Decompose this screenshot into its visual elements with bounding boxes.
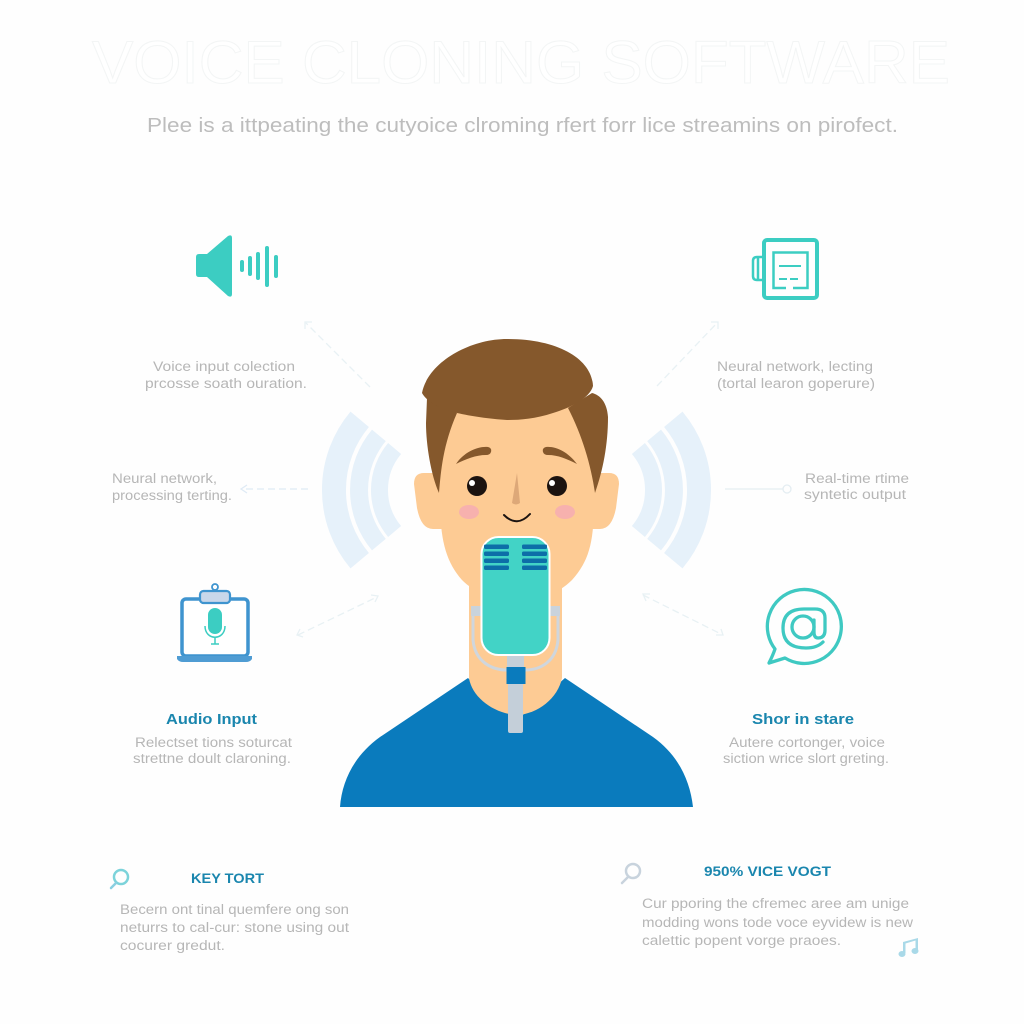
nose [512,473,520,504]
text: neural network testing: (tortal learon goperure) [717,376,875,391]
left ear [414,473,442,529]
heading: audio input: Audio Input [166,711,257,728]
eyes [467,476,567,496]
right ear [591,473,619,529]
icon: magnifier left [111,870,128,888]
text: key tort description: cocurer gredut. [120,938,225,953]
text: real-time output [804,471,909,502]
text: audio input description: strettne doult claroning. [133,751,291,766]
text: shor in stare description: Autere cortonger, voice [729,735,885,750]
icon: music note [898,938,918,957]
heading: 950% vice vogt: 950% VICE VOGT [704,863,831,879]
icon: at sign chat bubble [767,589,841,663]
eyebrows [456,447,577,464]
text: vice vogt description: Cur pporing the cfremec aree am unige [642,896,909,911]
text: audio input description [133,735,292,766]
text: voice input collection: prcosse soath ouration. [145,376,307,391]
text: key tort description [120,902,349,953]
cheeks [459,505,575,519]
icon: magnifier right [622,864,640,883]
arrow: double arrow left [297,595,378,637]
text: neural network processing: processing terting. [112,488,232,503]
face [440,400,594,600]
arrow: line with node to real-time text [725,485,791,493]
icon: laptop with microphone [177,584,252,662]
arrow: to neural network text [241,485,308,493]
text: shor in stare description: siction wrice slort greting. [723,751,889,766]
microphone yoke [473,607,558,670]
right sound waves [638,419,699,561]
text: neural network testing: Neural network, lecting [717,359,873,374]
microphone body [482,537,550,655]
text: neural network processing [112,471,232,503]
text: voice input collection: Voice input colection [153,359,295,374]
left sound waves [334,419,395,561]
icon: speaker with sound bars [196,235,278,297]
icon: document [753,240,817,298]
arrow: double arrow right [643,594,723,635]
text: real-time output: syntetic output [804,487,906,502]
shirt [340,678,693,807]
subtitle: Plee is a ittpeating the cutyoice clroming rfert forr lice streamins on pirofect. [147,115,898,137]
arrow: to speaker icon [305,322,370,387]
smile [504,514,530,521]
text: vice vogt description: modding wons tode voce eyvidew is new [642,915,913,930]
microphone stand [507,654,524,668]
text: key tort description: neturrs to cal-cur: stone using out [120,920,349,935]
text: neural network processing: Neural network, [112,471,217,486]
text: key tort description: Becern ont tinal quemfere ong son [120,902,349,917]
microphone grille [484,544,547,570]
title: VOICE CLONING SOFTWARE [92,29,950,96]
hair top [422,339,593,420]
heading: shor in stare: Shor in stare [752,711,854,728]
text: real-time output: Real-time rtime [805,471,909,486]
neck [469,570,562,715]
text: voice input collection [145,359,307,391]
arrow: to document icon [657,322,718,386]
central figure: person speaking into microphone [340,339,693,807]
text: vice vogt description [642,896,913,948]
text: vice vogt description: calettic popent vorge praoes. [642,933,841,948]
hair sides [426,393,608,493]
text: neural network testing [717,359,875,391]
text: shor in stare description [723,735,889,766]
text: audio input description: Relectset tions soturcat [135,735,292,750]
heading: key tort: KEY TORT [191,870,264,886]
